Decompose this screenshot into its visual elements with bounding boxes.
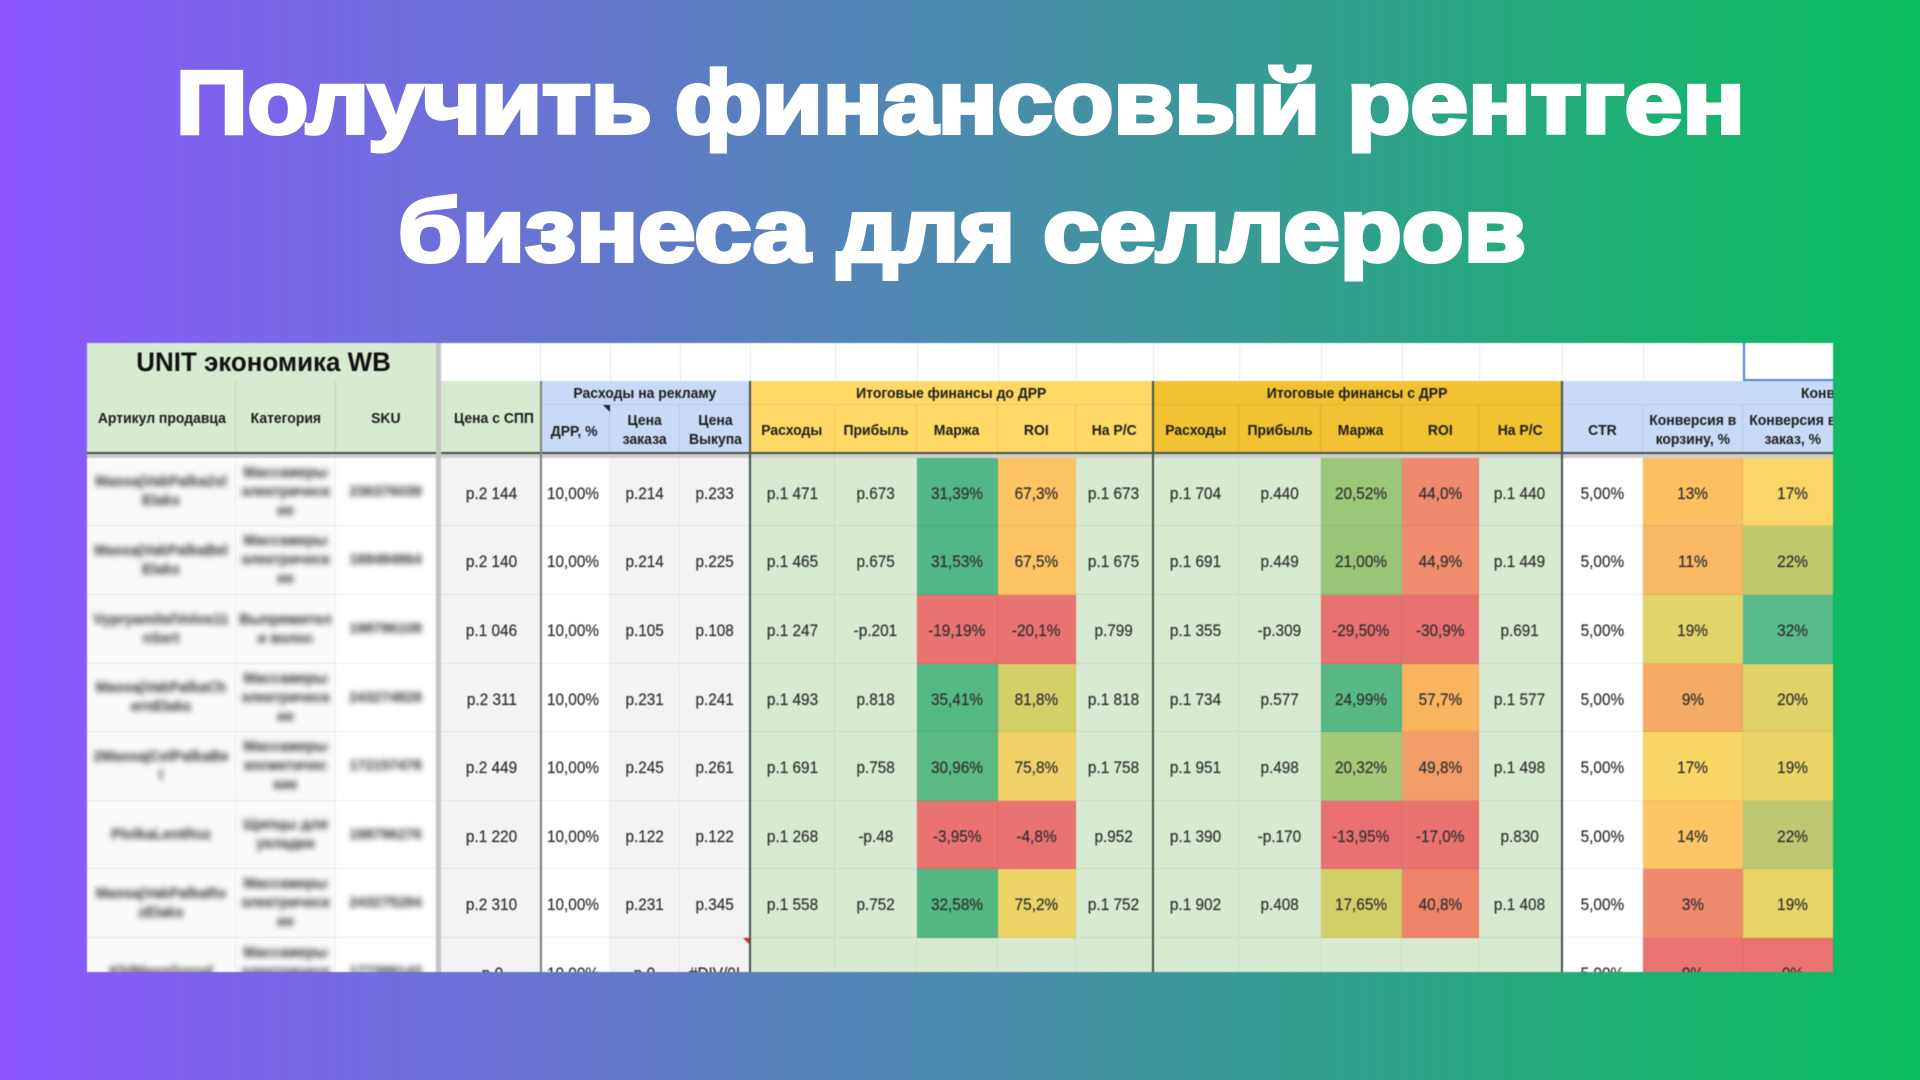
table row 3: р.1 046: [466, 622, 518, 640]
table row 2: р.1 465: [767, 553, 819, 571]
error marker: red triangle: [743, 938, 750, 945]
header: margin 2: Маржа: [1338, 422, 1384, 438]
table row 4: Массажеры: [243, 670, 328, 686]
table row 1: 67,3%: [1015, 484, 1058, 502]
table row 2: 5,00%: [1580, 553, 1624, 571]
header group: finance before DRR: [750, 381, 1153, 404]
table row 1: Массажеры: [243, 464, 328, 480]
table row 3: 5,00%: [1580, 622, 1624, 640]
header: SKU: SKU: [371, 410, 401, 426]
table row 6: р.1 390: [1170, 828, 1221, 846]
table row 4: 81,8%: [1015, 690, 1058, 708]
table row 6: -4,8%: [1016, 828, 1057, 846]
table row 1: 13%: [1677, 484, 1708, 502]
table row 2: 11%: [1678, 553, 1707, 571]
table row 7: р.1 558: [767, 896, 819, 914]
header group: finance with DRR: [1153, 381, 1562, 404]
header: buyout price: [680, 404, 750, 453]
table row 6: Щипцы для: [243, 817, 328, 833]
table row 7: р.2 310: [466, 896, 518, 914]
table row 4: р.818: [856, 690, 895, 708]
table row 2: р.675: [856, 553, 895, 571]
top empty grid row: [441, 343, 1833, 381]
table row 5: 172157478: [349, 758, 422, 774]
table row 1: р.2 144: [466, 484, 518, 502]
table row 5: р.1 691: [767, 759, 819, 777]
table row 3: р.1 355: [1170, 622, 1221, 640]
table row 3: р.105: [625, 622, 664, 640]
table row 5: Массажеры: [243, 739, 328, 755]
table row 6: -3,95%: [933, 828, 981, 846]
table row 4: 243274828: [349, 690, 422, 706]
table row 4: 35,41%: [931, 690, 983, 708]
table row 6: р.1 268: [767, 828, 819, 846]
frozen column divider: [436, 343, 441, 972]
header: profit 1: [835, 404, 917, 453]
table row 4: ernElaks: [131, 699, 191, 715]
table row 4: р.2 311: [467, 690, 517, 708]
table row 2: р.1 449: [1494, 553, 1546, 571]
table row 3: 198796108: [349, 621, 422, 637]
table row 1: р.1 440: [1494, 484, 1546, 502]
column rule: conversions: [1561, 381, 1563, 972]
table row 5: р.245: [625, 759, 664, 777]
table row 3: -20,1%: [1012, 622, 1061, 640]
table row 4: 5,00%: [1580, 690, 1624, 708]
title: Получить: [176, 52, 652, 152]
table row 6: 10,00%: [546, 828, 599, 846]
table row 2: электрическ: [241, 552, 330, 568]
title: для: [837, 180, 1015, 280]
selected cell outline: [1743, 341, 1863, 381]
header group: finance before DRR: Итоговые финансы до ДРР: [856, 385, 1047, 402]
header group: ad spend: Расходы на рекламу: [574, 385, 716, 402]
table row 4: р.231: [625, 690, 664, 708]
header: DRR: ДРР, %: [551, 422, 598, 440]
header: order price: Цена: [627, 412, 662, 429]
table row 5: кие: [273, 777, 298, 793]
table row 3: [87, 594, 1834, 665]
table row 6: PlolkaLentRoz: [111, 826, 211, 842]
table row 6: -р.170: [1258, 828, 1301, 846]
table row 3: и волос: [258, 630, 313, 646]
table row 5: р.261: [695, 759, 734, 777]
table row 6: р.122: [625, 828, 664, 846]
title: рентген: [1347, 52, 1745, 152]
column rule: finance with DRR: [1152, 381, 1154, 972]
table row 7: 17,65%: [1335, 896, 1387, 914]
title: селлеров: [1043, 180, 1526, 280]
table row 1: Elaks: [142, 493, 180, 509]
table row 7: MassajVakPalkaRo: [96, 886, 226, 902]
header: category: Категория: [250, 410, 321, 426]
table row 7: 75,2%: [1015, 896, 1058, 914]
table row 5: 10,00%: [546, 759, 599, 777]
header: ROI 2: ROI: [1428, 422, 1452, 438]
header: order price: заказа: [623, 431, 666, 448]
column rule: before DRR: [540, 381, 542, 972]
table row 6: [87, 800, 1834, 870]
table row 2: ие: [277, 571, 294, 587]
table row 2: 31,53%: [931, 553, 983, 571]
table row 3: -р.201: [854, 622, 897, 640]
header: expenses 2: [1153, 404, 1239, 453]
table row 2: 21,00%: [1335, 553, 1387, 571]
table row 3: р.108: [695, 622, 734, 640]
table row 4: MassajVakPalkaCh: [96, 680, 226, 696]
table row 4: ие: [277, 708, 294, 724]
header: price with SPP: Цена с СПП: [454, 410, 533, 426]
table row 5: 19%: [1777, 759, 1808, 777]
table row 2: MassajVakPalkaBel: [94, 542, 228, 558]
title: бизнеса: [398, 180, 812, 280]
header: profit 2: Прибыль: [1247, 422, 1312, 438]
table row 5: р.2 449: [466, 759, 518, 777]
table row 5: р.498: [1260, 759, 1299, 777]
table row 5: 5,00%: [1580, 759, 1624, 777]
table row 7: Массажеры: [243, 876, 328, 892]
table row 5: косметичес: [244, 758, 327, 774]
table row 3: -29,50%: [1332, 622, 1390, 640]
header: margin 2: [1321, 404, 1402, 453]
table row 1: MassajVakPalka2xl: [95, 474, 227, 490]
table row 1: 5,00%: [1580, 484, 1624, 502]
table row 1: р.1 673: [1088, 484, 1140, 502]
table row 5: 17%: [1677, 759, 1708, 777]
sheet title: UNIT экономика WB: [136, 346, 391, 376]
table row 3: р.799: [1095, 622, 1133, 640]
table row 7: р.408: [1260, 896, 1299, 914]
table row 3: 19%: [1677, 622, 1708, 640]
table row 3: nSert: [142, 630, 180, 646]
table row 6: 22%: [1777, 828, 1808, 846]
table row 2: р.214: [625, 553, 664, 571]
table row 3: 10,00%: [546, 622, 599, 640]
table row 2: 188484864: [349, 552, 422, 568]
header: profit 1: Прибыль: [843, 422, 908, 438]
header: cart conversion: корзину, %: [1655, 431, 1730, 448]
table row 4: р.1 734: [1170, 690, 1221, 708]
table row 1: 31,39%: [931, 484, 983, 502]
table row 4: 20%: [1777, 690, 1808, 708]
table row 2: 67,5%: [1015, 553, 1058, 571]
table row 7: электрическ: [241, 895, 330, 911]
table row 1: р.1 471: [767, 484, 819, 502]
header: CTR: CTR: [1588, 422, 1616, 438]
table row 3: 32%: [1777, 622, 1808, 640]
table row 8 (cut off): Массажеры: [243, 945, 328, 961]
table row 1: [87, 457, 1834, 527]
header: article: Артикул продавца: [98, 410, 226, 426]
header group: conversions: [1562, 381, 1833, 404]
header: buyout price: Цена: [698, 412, 732, 429]
table row 6: р.952: [1095, 828, 1133, 846]
table row 3: -19,19%: [928, 622, 986, 640]
header: CTR: [1562, 404, 1643, 453]
table row 3: -30,9%: [1416, 622, 1464, 640]
header bottom rule: [87, 452, 1833, 454]
table row 7: 5,00%: [1580, 896, 1624, 914]
header: expenses 1: Расходы: [762, 422, 822, 438]
header: order price: [610, 404, 680, 453]
table row 7: р.231: [625, 896, 664, 914]
table row 2: Elaks: [142, 562, 180, 578]
header: DRR: [540, 404, 610, 453]
header: cart conversion: [1643, 404, 1743, 453]
table row 2: р.449: [1260, 553, 1299, 571]
table row 8 (cut off): [104, 937, 1834, 973]
table row 5: р.1 758: [1088, 759, 1140, 777]
table row 4: р.577: [1260, 690, 1299, 708]
header: to account 2: [1479, 404, 1562, 453]
header: ROI 1: ROI: [1024, 422, 1049, 438]
header: to account 1: [1076, 404, 1153, 453]
header: to account 2: На Р/С: [1498, 422, 1543, 438]
table row 6: 198796276: [349, 826, 422, 842]
table row 4: 57,7%: [1418, 690, 1462, 708]
table row 1: 20,52%: [1335, 484, 1387, 502]
header: margin 1: Маржа: [934, 422, 980, 438]
table row 2: р.225: [695, 553, 734, 571]
table row 1: р.1 704: [1170, 484, 1221, 502]
header: profit 2: [1239, 404, 1321, 453]
table row 1: 236376039: [349, 484, 422, 500]
table row 7: [87, 868, 1834, 939]
header: order conversion: заказ, %: [1765, 431, 1821, 448]
table row 6: -13,95%: [1332, 828, 1390, 846]
table row 7: ие: [277, 914, 294, 930]
header: price with SPP: [441, 381, 540, 453]
table row 7: р.1 408: [1494, 896, 1546, 914]
table row 1: ие: [277, 502, 294, 518]
table row 3: Выпрямител: [239, 612, 332, 628]
table row 1: электрическ: [241, 484, 330, 500]
table row 6: -17,0%: [1416, 828, 1464, 846]
header: expenses 1: [750, 404, 835, 453]
panel: unit economics spreadsheet: [87, 343, 1833, 972]
table row 4: р.1 818: [1088, 690, 1140, 708]
table row 2: р.2 140: [466, 553, 518, 571]
table row 5: 20,32%: [1335, 759, 1387, 777]
table row 7: 243275284: [349, 895, 422, 911]
table row 5: 2MassajCelPalkaBe: [93, 748, 229, 764]
table row 6: р.122: [695, 828, 734, 846]
header group: ad spend: [540, 381, 750, 404]
table row 6: 5,00%: [1580, 828, 1624, 846]
table row 4: р.1 577: [1494, 690, 1546, 708]
table row 1: р.673: [856, 484, 895, 502]
table row 7: 19%: [1777, 896, 1808, 914]
header: buyout price: Выкупа: [689, 431, 741, 448]
table row 6: -р.48: [858, 828, 893, 846]
table row 4: 9%: [1681, 690, 1704, 708]
table row 7: р.752: [856, 896, 895, 914]
table row 4: 10,00%: [546, 690, 599, 708]
table row 6: р.1 220: [466, 828, 518, 846]
table row 7: 32,58%: [931, 896, 983, 914]
table row 2: р.1 691: [1170, 553, 1221, 571]
table row 2: 10,00%: [546, 553, 599, 571]
table row 7: 40,8%: [1418, 896, 1462, 914]
header: article: [87, 381, 236, 453]
table row 7: р.1 902: [1170, 896, 1221, 914]
table row 6: 14%: [1677, 828, 1708, 846]
header: margin 1: [917, 404, 998, 453]
table row 5: 49,8%: [1418, 759, 1462, 777]
table row 2: [87, 525, 1834, 596]
table row 4: [87, 663, 1834, 733]
table row 4: р.241: [695, 690, 734, 708]
title: [176, 52, 1745, 282]
table row 5: р.1 498: [1494, 759, 1546, 777]
header: ROI 1: [998, 404, 1076, 453]
header: SKU: [336, 381, 436, 453]
table row 6: р.830: [1501, 828, 1539, 846]
header: cart conversion: Конверсия в: [1649, 412, 1736, 429]
table row 1: р.214: [625, 484, 664, 502]
comment marker: black triangle: [603, 405, 610, 412]
table row 7: zElaks: [138, 904, 184, 920]
table row 2: р.1 675: [1088, 553, 1140, 571]
table row 2: 44,9%: [1418, 553, 1462, 571]
table row 1: р.233: [695, 484, 734, 502]
table row 5: 30,96%: [931, 759, 983, 777]
title: финансовый: [675, 52, 1320, 152]
table row 4: р.1 493: [767, 690, 819, 708]
table row 3: р.1 247: [767, 622, 819, 640]
table row 7: 10,00%: [546, 896, 599, 914]
sheet title: [87, 343, 436, 381]
table row 1: 17%: [1777, 484, 1808, 502]
table row 7: р.1 752: [1088, 896, 1140, 914]
header: expenses 2: Расходы: [1165, 422, 1226, 438]
table row 3: р.691: [1501, 622, 1539, 640]
table row 6: укладки: [256, 836, 315, 852]
header: order conversion: [1743, 404, 1843, 453]
table row 5: р.758: [856, 759, 895, 777]
table row 5: l: [159, 768, 163, 784]
header group: finance with DRR: Итоговые финансы с ДРР: [1267, 385, 1448, 402]
table row 3: -р.309: [1258, 622, 1301, 640]
table row 5: [87, 731, 1834, 802]
header: category: [236, 381, 336, 453]
frozen header band: [87, 454, 1833, 458]
table row 2: Массажеры: [243, 533, 328, 549]
table row 5: 75,8%: [1015, 759, 1058, 777]
table row 1: р.440: [1260, 484, 1299, 502]
column rule: finance start: [749, 381, 751, 972]
table row 1: 10,00%: [546, 484, 599, 502]
table row 2: 22%: [1777, 553, 1808, 571]
header: to account 1: На Р/С: [1092, 422, 1137, 438]
table row 4: 24,99%: [1335, 690, 1387, 708]
table row 7: р.345: [695, 896, 734, 914]
table row 3: VypryamitelVolos11: [93, 612, 229, 628]
header: ROI 2: [1402, 404, 1479, 453]
table row 7: 3%: [1681, 896, 1704, 914]
table row 4: электрическ: [241, 690, 330, 706]
table row 5: р.1 951: [1170, 759, 1221, 777]
table row 1: 44,0%: [1418, 484, 1462, 502]
